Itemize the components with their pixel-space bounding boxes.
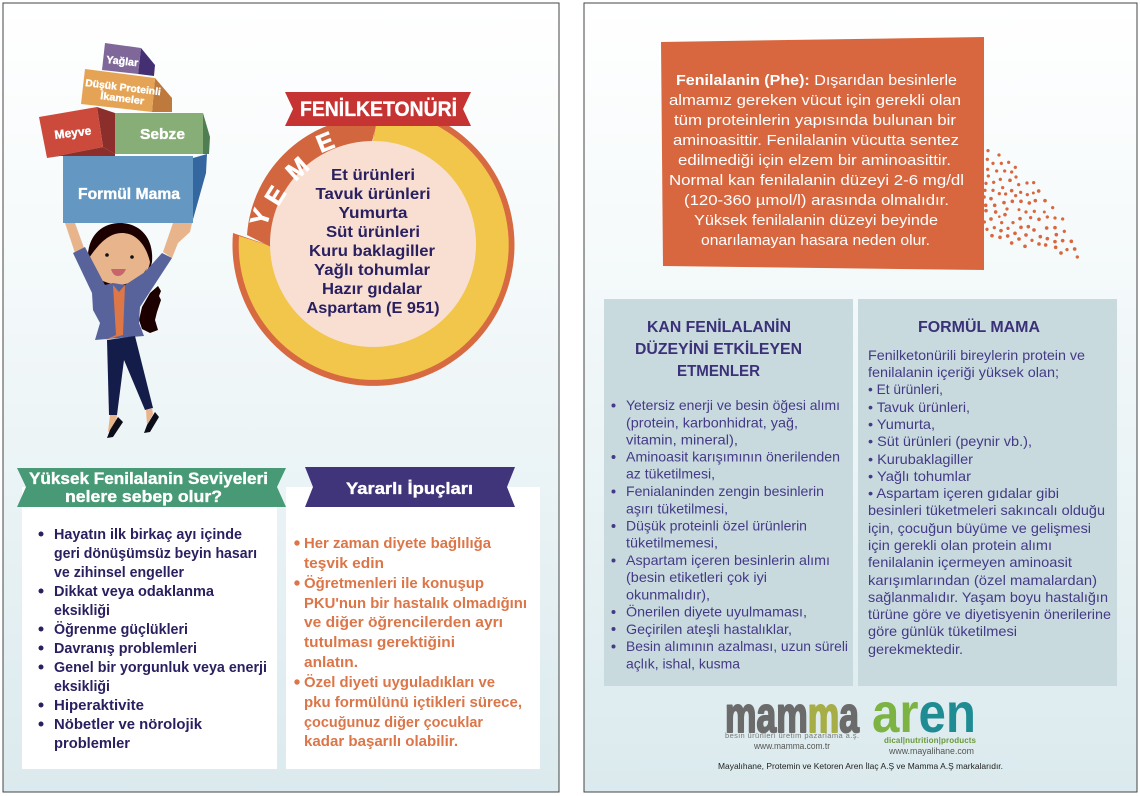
icon: stacked food boxes: Yağlar — [106, 54, 139, 69]
list: useful tips — [294, 535, 527, 750]
food list: Kuru baklagiller — [309, 243, 435, 260]
panel: phenylalanine definition — [661, 37, 984, 270]
panel: harmful effects card — [22, 487, 277, 769]
text block: formula: Fenilketonürili bireylerin protein ve — [868, 347, 1085, 363]
text block: formula: türüne göre ve diyetisyenin önerilerine — [868, 606, 1111, 622]
list: useful tips: pku formülünü içtikleri sürece, — [304, 694, 522, 711]
text block: formula: • Et ürünleri, — [868, 381, 943, 397]
list: factors: Yetersiz enerji ve besin öğesi alımı — [626, 397, 840, 413]
text block: formula: • Yağlı tohumlar — [868, 468, 971, 484]
list: useful tips: anlatın. — [304, 654, 358, 671]
panel: phenylalanine definition: onarılamayan hasara neden olur. — [701, 232, 930, 249]
text block: formula: besinleri tüketmeleri sakıncalı olduğu — [868, 502, 1105, 518]
food list: Et ürünleri — [331, 167, 415, 184]
list: factors: Geçirilen ateşli hastalıklar, — [626, 621, 792, 637]
logo: aren: dical|nutrition|products — [884, 736, 977, 745]
logo: aren: aren — [872, 681, 976, 744]
list: factors: Besin alımının azalması, uzun süreli — [626, 638, 848, 654]
list: effects of high phenylalanine: Öğrenme güçlükleri — [54, 621, 188, 638]
text block: formula: • Yumurta, — [868, 416, 935, 432]
list: effects of high phenylalanine — [38, 527, 267, 752]
list: useful tips: tutulması gerektiğini — [304, 634, 455, 651]
heading: formula: FORMÜL MAMA — [918, 319, 1040, 336]
food list — [306, 167, 440, 317]
panel: phenylalanine definition: aminoasittir. Fenilalanin vücutta sentez — [673, 132, 959, 149]
panel: left page — [3, 3, 559, 792]
heading: factors: KAN FENİLALANİN — [647, 319, 791, 336]
list: factors — [612, 397, 848, 671]
text block: formula: • Kurubaklagiller — [868, 451, 973, 467]
panel: phenylalanine definition: tüm proteinlerin yapısında bulunan bir — [674, 112, 956, 129]
list: effects of high phenylalanine: Nöbetler ve nörolojik — [54, 717, 203, 733]
text block: formula: fenilalanin içeriği yüksek olan; — [868, 364, 1059, 380]
list: factors: tüketilmemesi, — [626, 535, 718, 551]
text block: formula: • Aspartam içeren gıdalar gibi — [868, 485, 1059, 501]
outer orange ring — [232, 104, 514, 386]
food list: Tavuk ürünleri — [316, 186, 430, 203]
chart: foods to avoid circle — [232, 104, 514, 386]
list: factors: Fenialaninden zengin besinlerin — [626, 483, 824, 499]
list: useful tips: teşvik edin — [304, 555, 384, 572]
panel: phenylalanine definition: Yüksek fenilalanin düzeyi beyinde — [694, 212, 938, 229]
text block: formula: için, çocuğun büyüme ve gelişmesi — [868, 520, 1091, 536]
icon: stacked food boxes — [39, 43, 210, 223]
list: factors: açlık, ishal, kusma — [626, 655, 740, 671]
panel: factors affecting blood phenylalanine — [604, 299, 853, 686]
list: effects of high phenylalanine: eksikliği — [54, 603, 110, 619]
panel: phenylalanine definition: Fenilalanin (Phe): Dışarıdan besinlerle — [676, 72, 957, 89]
food list: Yağlı tohumlar — [314, 262, 430, 279]
inner peach circle — [270, 141, 476, 347]
yellow ring — [239, 110, 509, 380]
list: useful tips: PKU'nun bir hastalık olmadığını — [304, 595, 527, 612]
food list: Yumurta — [338, 205, 408, 222]
heading banner: useful tips — [305, 467, 515, 507]
logo: mamma: besin ürünleri üretim pazarlama a.ş. — [725, 731, 859, 740]
footer note: Mayalıhane, Protemin ve Ketoren Aren İlaç A.Ş ve Mamma A.Ş markalarıdır. — [718, 761, 1003, 771]
list: useful tips: Öğretmenleri ile konuşup — [304, 575, 484, 592]
list: effects of high phenylalanine: Hiperaktivite — [54, 698, 144, 714]
icon: stacked food boxes: Meyve — [54, 124, 92, 142]
icon: stacked food boxes: Formül Mama — [78, 186, 180, 203]
curved label YEME: E — [312, 126, 338, 159]
curved label YEME: Y — [245, 205, 277, 230]
panel: tips card — [286, 487, 540, 769]
logo: mamma: www.mamma.com.tr — [753, 741, 830, 751]
list: factors: aşırı tüketilmesi, — [626, 500, 728, 516]
list: factors: okunmalıdır), — [626, 586, 710, 602]
heading: factors — [635, 319, 802, 380]
panel: formula — [858, 299, 1117, 686]
list: useful tips: çocuğunuz diğer çocuklar — [304, 714, 483, 731]
orange segment — [247, 117, 378, 247]
decorative dots — [982, 149, 1079, 258]
icon: woman carrying boxes — [65, 223, 192, 438]
list: factors: Aminoasit karışımının önerilenden — [626, 449, 840, 465]
list: effects of high phenylalanine: Dikkat veya odaklanma — [54, 584, 215, 600]
list: factors: vitamin, mineral), — [626, 431, 738, 447]
list: factors: Aspartam içeren besinlerin alımı — [626, 552, 830, 568]
list: factors: Önerilen diyete uyulmaması, — [626, 603, 807, 620]
text block: formula: göre günlük tüketilmesi — [868, 623, 1017, 639]
heading banner: FENİLKETONÜRİ — [285, 92, 471, 126]
icon: stacked food boxes: İkameler — [100, 89, 145, 107]
icon: stacked food boxes: Düşük Proteinli — [85, 78, 162, 98]
icon: stacked food boxes: Sebze — [140, 126, 185, 143]
food list: Hazır gıdalar — [322, 281, 422, 298]
heading banner: high phenylalanine effects — [17, 468, 286, 507]
text block: formula: fenilalanin içermeyen aminoasit — [868, 554, 1072, 570]
food list: Aspartam (E 951) — [306, 300, 440, 317]
text block: formula: sağlanmalıdır. Yaşam boyu hastalığın — [868, 589, 1108, 605]
heading: factors: ETMENLER — [677, 363, 760, 380]
logo: aren: www.mayalihane.com — [888, 746, 974, 756]
list: effects of high phenylalanine: Davranış problemleri — [54, 641, 197, 657]
list: effects of high phenylalanine: eksikliği — [54, 679, 110, 695]
heading: factors: DÜZEYİNİ ETKİLEYEN — [635, 341, 802, 358]
list: effects of high phenylalanine: geri dönüşümsüz beyin hasarı — [54, 546, 257, 562]
list: factors: (protein, karbonhidrat, yağ, — [626, 414, 798, 430]
text block: formula: • Süt ürünleri (peynir vb.), — [868, 433, 1032, 449]
list: useful tips: kadar başarılı olabilir. — [304, 733, 458, 750]
panel: phenylalanine definition: Normal kan fenilalanin düzeyi 2-6 mg/dl — [669, 172, 964, 189]
text block: formula: gerekmektedir. — [868, 641, 963, 657]
heading banner: high phenylalanine effects: nelere sebep olur? — [65, 488, 222, 506]
text block: formula — [868, 347, 1111, 657]
panel: right page — [584, 3, 1137, 792]
text block: formula: karışımlarından (özel mamalardan) — [868, 572, 1097, 588]
logo: mamma: mamma — [725, 687, 860, 743]
list: effects of high phenylalanine: ve zihinsel engeller — [54, 565, 184, 581]
list: effects of high phenylalanine: Genel bir yorgunluk veya enerji — [54, 660, 267, 676]
list: effects of high phenylalanine: Hayatın ilk birkaç ayı içinde — [54, 527, 242, 543]
text block: formula: • Tavuk ürünleri, — [868, 399, 970, 415]
list: factors: Düşük proteinli özel ürünlerin — [626, 517, 807, 533]
list: useful tips: ve diğer öğrencilerden ayrı — [304, 614, 503, 631]
list: useful tips: Özel diyeti uyguladıkları ve — [304, 674, 495, 691]
list: useful tips: Her zaman diyete bağlılığa — [304, 535, 492, 552]
panel: phenylalanine definition: edilmediği için elzem bir aminoasittir. — [678, 152, 951, 169]
panel: phenylalanine definition: almamız gereken vücut için gerekli olan — [669, 92, 961, 109]
curved label YEME: M — [281, 152, 315, 186]
food list: Süt ürünleri — [326, 224, 420, 241]
list: factors: az tüketilmesi, — [626, 466, 715, 482]
heading banner: useful tips: Yararlı İpuçları — [346, 479, 473, 498]
list: effects of high phenylalanine: problemler — [54, 736, 130, 752]
curved label YEME: E — [260, 181, 292, 210]
heading banner: high phenylalanine effects: Yüksek Fenilalanin Seviyeleri — [29, 470, 268, 488]
panel: phenylalanine definition: (120-360 µmol/l) arasında olmalıdır. — [684, 192, 949, 209]
list: factors: (besin etiketleri çok iyi — [626, 569, 767, 585]
text block: formula: için gerekli olan protein alımı — [868, 537, 1052, 553]
curved label YEME — [245, 126, 338, 230]
heading banner: FENİLKETONÜRİ: FENİLKETONÜRİ — [300, 98, 457, 121]
